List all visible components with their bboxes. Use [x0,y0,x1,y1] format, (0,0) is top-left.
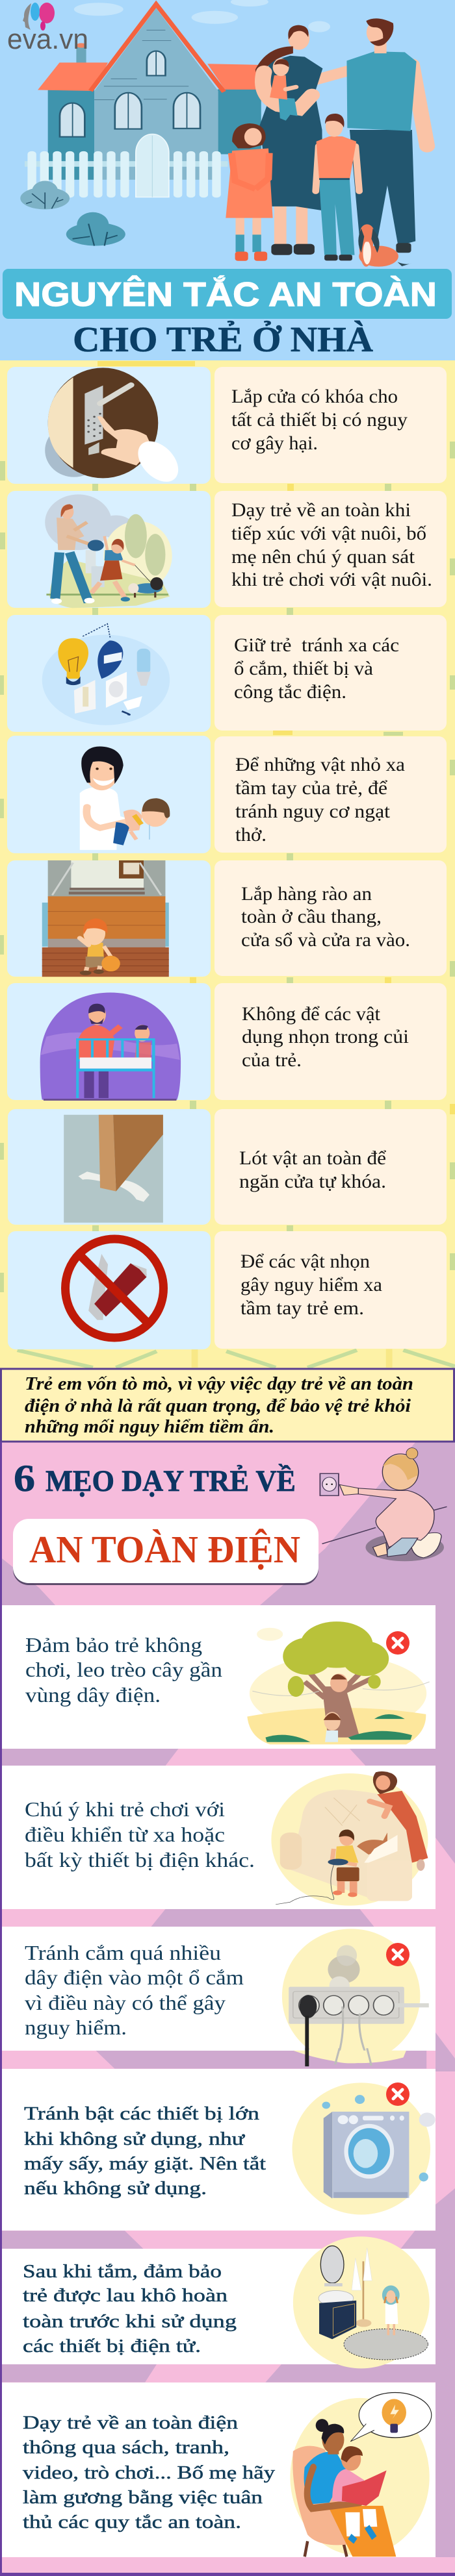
card background [2,1927,436,2051]
intro text: những mối nguy hiểm tiềm ẩn. [25,1417,274,1437]
text: Giữ trẻ tránh xa các [234,634,399,656]
rule card 2 [7,491,447,608]
text: Không để các vật [242,1003,381,1025]
tip card 2 [2,1766,436,1909]
illustration: baby touching socket [320,1448,447,1561]
text: Sau khi tắm, đảm bảo [23,2261,222,2282]
hero illustration: house and family [20,0,427,267]
tip card 1 [2,1605,436,1749]
text [23,2412,276,2532]
boy [316,114,359,260]
text: toàn trước khi sử dụng [23,2311,237,2332]
fence [25,151,228,197]
illustration: washing machine [292,2082,436,2214]
card background [2,2382,436,2557]
rule card 8 [8,1231,447,1349]
image panel [7,860,211,977]
text [239,1147,387,1192]
image panel [7,983,211,1100]
text panel [214,736,447,853]
text [242,1003,409,1071]
text: công tắc điện. [234,681,346,703]
bushes [20,181,125,246]
tip card 4 [2,2069,436,2231]
text [24,2103,266,2199]
panel: home safety rules [0,360,455,1369]
hero panel [0,0,455,360]
tip card 6 [2,2382,436,2557]
illustration: door stopper [64,1115,163,1223]
intro text: Trẻ em vốn tò mò, vì vậy việc dạy trẻ về an toàn [25,1374,413,1394]
illustration: bulb, meter and socket [42,624,170,725]
rule card 7 [8,1109,447,1225]
illustration: door lock [45,368,187,487]
intro text [25,1374,413,1437]
text: cửa sổ và cửa ra vào. [241,929,410,951]
text: thủ các quy tắc an toàn. [23,2512,241,2532]
section heading: 6 [14,1457,35,1499]
illustration: girl after bath [293,2236,430,2368]
rule card 4 [7,736,447,853]
text [23,2261,237,2357]
tip card 3 [2,1927,436,2066]
icon: warning cross [386,1943,410,1966]
illustration: overloaded power strip [282,1929,429,2066]
text: Lắp hàng rào an [241,883,372,905]
text [231,386,408,454]
text: dây điện vào một ổ cắm [25,1966,244,1989]
illustration: parent helping choking child [80,746,170,850]
text: Lắp cửa có khóa cho [231,386,398,407]
text: vùng dây điện. [25,1683,161,1707]
text panel [214,615,447,731]
text: tránh nguy cơ ngạt [235,801,391,822]
text panel [214,860,447,976]
card background [2,2069,436,2231]
image panel [7,736,211,853]
text: Chú ý khi trẻ chơi với [25,1797,225,1821]
text: Dạy trẻ về an toàn điện [23,2412,239,2433]
illustration: stair gate with boy [42,860,169,977]
text: thông qua sách, tranh, [23,2437,229,2458]
text: tất cả thiết bị có nguy [231,409,408,431]
text: chơi, leo trèo cây gần [25,1658,222,1681]
text: toàn ở cầu thang, [241,906,382,927]
text: dụng nhọn trong củi [242,1026,409,1047]
section heading: MẸO DẠY TRẺ VỀ [46,1464,296,1498]
dad [315,18,427,253]
dog [358,224,412,267]
illustration: father and baby in crib [40,993,181,1101]
girl [226,123,273,261]
illustration overflow: power cables [293,2048,406,2066]
text panel [214,491,447,607]
text: làm gương bằng việc tuân [23,2487,263,2508]
text [25,1797,255,1871]
text: vì điều này có thể gây [25,1991,226,2014]
text: nguy hiểm. [25,2016,127,2039]
door [136,134,169,197]
text: khi không sử dụng, như [24,2129,246,2149]
tip card 5 [2,2236,436,2368]
right strip pink accent [436,1838,455,2573]
text: mấy sấy, máy giặt. Nên tắt [24,2153,266,2174]
text: gây nguy hiểm xa [240,1274,382,1295]
text: tiếp xúc với vật nuôi, bố [231,523,426,544]
logo: eva.vn: eva.vn [7,23,88,55]
text: video, trò chơi... Bố mẹ hãy [23,2462,276,2483]
text: ổ cắm, thiết bị và [234,658,373,679]
text: Lót vật an toàn để [239,1147,387,1169]
text: Tránh cắm quá nhiều [25,1941,221,1964]
title banner: NGUYÊN TẮC AN TOÀN [14,275,437,314]
section heading [14,1457,296,1499]
text: bất kỳ thiết bị điện khác. [25,1848,255,1871]
subtitle: CHO TRẺ Ở NHÀ [73,319,373,359]
background shapes [0,1442,455,2576]
illustration: child climbing tree [247,1621,430,1744]
text panel [214,367,447,483]
text: của trẻ. [242,1049,302,1071]
icon: warning cross [386,2082,410,2106]
title pill [13,1519,318,1585]
text [25,1633,222,1707]
text: các thiết bị điện tử. [23,2336,201,2357]
text panel [214,1231,447,1349]
image panel [7,491,211,608]
text: trẻ được lau khô hoàn [23,2285,228,2306]
text: Tránh bật các thiết bị lớn [24,2103,260,2124]
text: Để các vật nhọn [240,1251,370,1272]
house [38,4,261,180]
image panel [7,615,211,732]
card background [2,1766,436,1909]
text: Đảm bảo trẻ không [25,1633,202,1657]
title pill: AN TOÀN ĐIỆN [29,1528,300,1571]
mom [255,25,322,255]
text [235,754,405,845]
rule card 1 [7,367,447,487]
image panel [8,1109,211,1225]
text: khi trẻ chơi với vật nuôi. [231,569,432,590]
text: Dạy trẻ về an toàn khi [231,499,411,521]
intro text: điện ở nhà là rất quan trọng, để bảo vệ trẻ khỏi [25,1396,411,1416]
toddler [270,58,298,121]
card background [2,1605,436,1749]
text: mẹ nên chú ý quan sát [231,546,415,568]
icon: warning cross [386,1631,410,1655]
text [240,1251,382,1319]
text panel [214,983,447,1100]
illustration: no sharp objects sign [65,1239,164,1338]
illustration: mother, child and dog [45,494,172,608]
rule card 5 [7,860,447,977]
logo: eva.vn [7,3,88,55]
text: Để những vật nhỏ xa [235,754,405,775]
text: điều khiển từ xa hoặc [25,1823,225,1846]
text [231,499,432,590]
card background [2,2249,436,2364]
text: tầm tay của trẻ, để [235,777,388,799]
text [25,1941,244,2039]
rule card 6 [7,983,447,1101]
text: nếu không sử dụng. [24,2178,207,2199]
illustration: boy with game controller on sofa [271,1771,428,1906]
panel: electrical safety section [0,1369,455,2576]
text: tầm tay trẻ em. [240,1297,364,1319]
text: ngăn cửa tự khóa. [239,1171,386,1192]
illustration: mother reading to child [290,2393,432,2557]
text: thở. [235,824,266,845]
text: cơ gây hại. [231,432,318,454]
intro callout [1,1369,454,1442]
image panel [8,1231,211,1349]
title banner [3,269,452,319]
clouds [74,0,330,32]
text panel [214,1109,447,1225]
image panel [7,367,211,484]
text [234,634,399,703]
rule card 3 [7,615,447,732]
text [241,883,410,951]
